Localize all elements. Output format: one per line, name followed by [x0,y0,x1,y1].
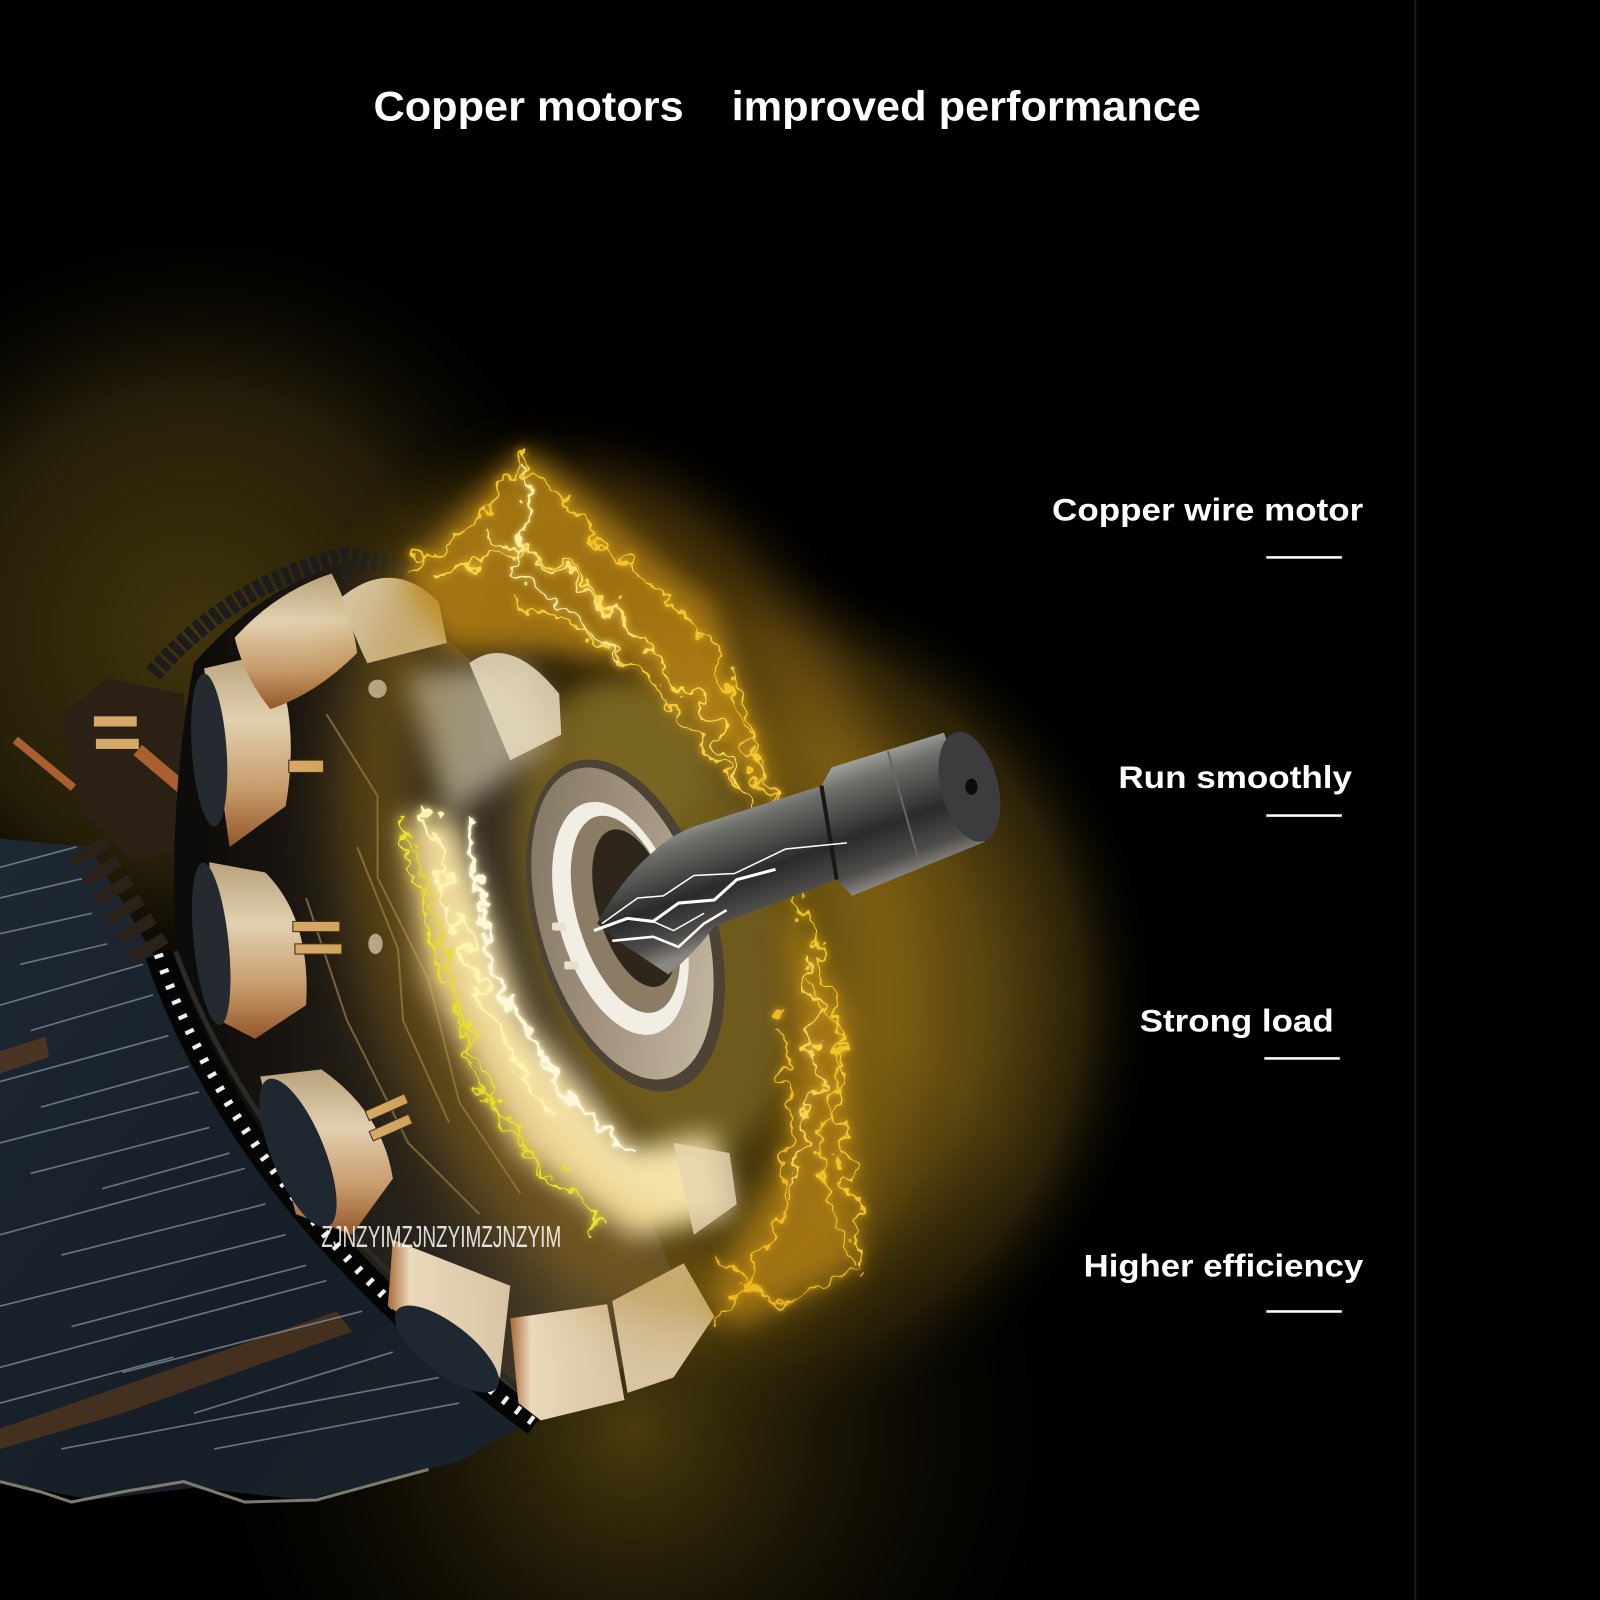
copper coil: lower left [244,1069,393,1237]
feature label: Strong load: Strong load [1140,1003,1334,1039]
lightning arcs [398,459,860,1327]
watermark: ZJNZYIMZJNZYIMZJNZYIM [321,1220,561,1254]
copper coil: bottom centre [510,1304,624,1420]
title: improved performance [732,82,1201,129]
copper coil: top [235,573,357,709]
shaft [597,725,1011,974]
title [373,82,1201,129]
bearing [490,735,762,1116]
title: Copper motors [373,82,684,129]
stator body [0,839,531,1502]
gear teeth [87,847,153,957]
rim with white ticks [158,951,551,1423]
upper rim chain [153,556,418,673]
coil clips [289,760,412,1141]
circuit plate [174,559,694,1420]
faded coils in energy [469,653,737,1235]
copper coil: left upper [187,653,291,847]
copper coil: left middle [185,861,307,1039]
motor illustration [0,444,1011,1502]
copper coil: top right [342,578,447,663]
energy glow [291,444,974,1352]
rear mechanism and copper rods [15,679,250,862]
rear hollow behind bearing [469,654,837,1183]
feature label: Copper wire motor: Copper wire motor [1052,491,1363,527]
feature label: Run smoothly: Run smoothly [1118,759,1352,795]
copper coil: bottom right [612,1263,714,1393]
vertical divider [1414,0,1416,1600]
copper coil: bottom left [382,1240,512,1407]
feature label: Higher efficiency: Higher efficiency [1084,1248,1364,1284]
shaft lightning [594,843,847,947]
hollow upper highlight [545,663,730,857]
